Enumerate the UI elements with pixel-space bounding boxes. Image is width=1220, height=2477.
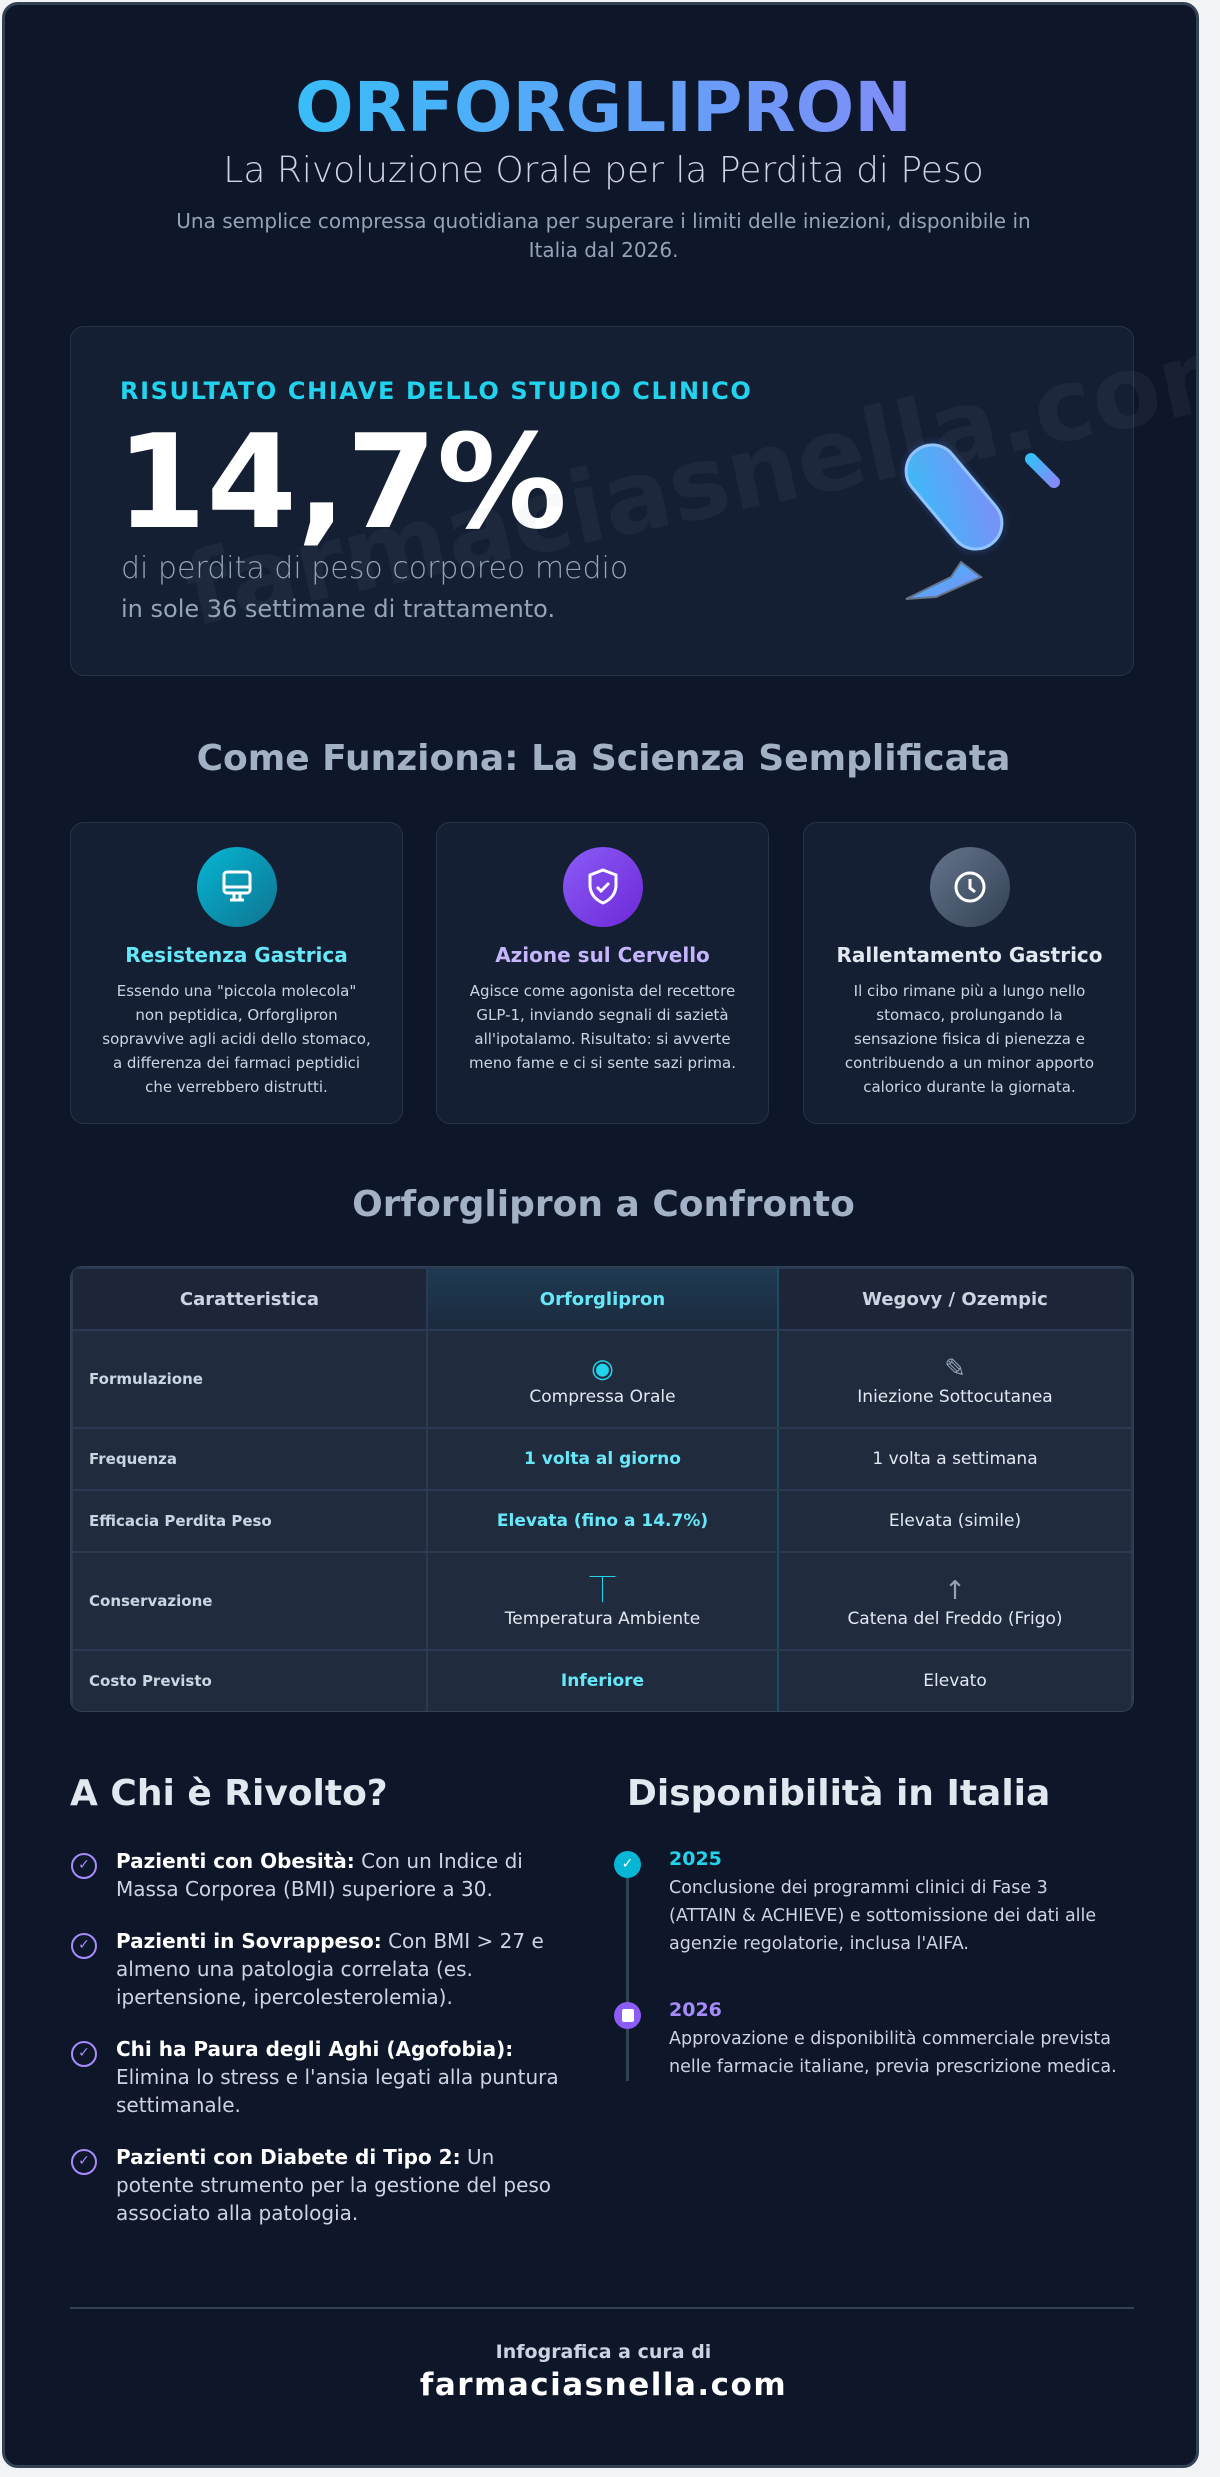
comparison table: 1 volta al giorno (524, 1449, 681, 1469)
list: target patients: ✓ (78, 2153, 90, 2169)
comparison table: Inferiore (561, 1671, 644, 1691)
footer credit: Infografica a cura di (496, 2341, 711, 2363)
comparison table: Efficacia Perdita Peso (89, 1512, 272, 1530)
timeline: ✓ (622, 1856, 633, 1872)
heading: disponibilità: Disponibilità in Italia (627, 1773, 1050, 1814)
title: ORFORGLIPRON (295, 68, 912, 148)
milestone 2025 (614, 1848, 1096, 1954)
panel: resistenza gastrica (70, 822, 403, 1124)
heading: come funziona: Come Funziona: La Scienza Semplificata (197, 738, 1010, 779)
timeline (614, 1848, 1117, 2081)
subtitle: La Rivoluzione Orale per la Perdita di Peso (223, 150, 984, 191)
card title: Rallentamento Gastrico (836, 943, 1103, 967)
list: target patients: ✓ (78, 1937, 90, 1953)
comparison table: Elevato (923, 1671, 987, 1691)
comparison table: Elevata (fino a 14.7%) (497, 1511, 708, 1531)
comparison table: ✎ (944, 1354, 966, 1384)
timeline: Conclusione dei programmi clinici di Fase 3 (ATTAIN & ACHIEVE) e sottomissione dei dati alle agenzie regolatorie, inclusa l'AIFA. (669, 1878, 1096, 1954)
card title: Azione sul Cervello (495, 943, 710, 967)
intro text: Una semplice compressa quotidiana per superare i limiti delle iniezioni, disponibile in (176, 209, 1031, 233)
comparison table: ⏉ (589, 1576, 616, 1606)
number caption: di perdita di peso corporeo medio (121, 551, 628, 586)
footer credit: farmaciasnella.com (420, 2367, 787, 2403)
kicker label: RISULTATO CHIAVE DELLO STUDIO CLINICO (120, 377, 752, 405)
comparison table: Costo Previsto (89, 1672, 212, 1690)
intro text: Italia dal 2026. (529, 238, 678, 262)
comparison table: Conservazione (89, 1592, 212, 1610)
list item: sovrappeso (71, 1929, 544, 2009)
list: target patients: Pazienti in Sovrappeso: Con BMI > 27 e almeno una patologia correlata (es. ipertensione, ipercolesterolemia). (116, 1929, 544, 2009)
list: target patients: Chi ha Paura degli Aghi (Agofobia): Elimina lo stress e l'ansia legati alla puntura settimanale. (116, 2037, 559, 2117)
list: target patients: Pazienti con Obesità: Con un Indice di Massa Corporea (BMI) superiore a 30. (116, 1849, 523, 1901)
comparison table (70, 1266, 1134, 1712)
list: target patients: Pazienti con Diabete di Tipo 2: Un potente strumento per la gestione del peso associato alla patologia. (116, 2145, 551, 2225)
panel: key result (70, 326, 1134, 676)
heading: a chi è rivolto: A Chi è Rivolto? (70, 1773, 388, 1814)
comparison table: Wegovy / Ozempic (862, 1288, 1048, 1310)
big number: 14,7% (116, 406, 567, 558)
icon: monitor (197, 847, 277, 927)
comparison table: ◉ (591, 1354, 614, 1384)
comparison table: Iniezione Sottocutanea (857, 1387, 1053, 1407)
card text: Agisce come agonista del recettore GLP-1, inviando segnali di sazietà all'ipotalamo. Risultato: si avverte meno fame e ci si sente sazi prima. (469, 982, 736, 1072)
timeline: Approvazione e disponibilità commerciale prevista nelle farmacie italiane, previa prescrizione medica. (669, 2029, 1117, 2077)
card title: Resistenza Gastrica (125, 943, 348, 967)
icon: pill (900, 439, 1060, 600)
comparison table: Caratteristica (180, 1288, 319, 1310)
list item: agofobia (71, 2037, 559, 2117)
comparison table: ↑ (944, 1576, 966, 1606)
comparison table: 1 volta a settimana (872, 1449, 1038, 1469)
card text: Essendo una "piccola molecola" non peptidica, Orforglipron sopravvive agli acidi dello stomaco, a differenza dei farmaci peptidici che verrebbero distrutti. (102, 982, 371, 1096)
list: target patients: ✓ (78, 2045, 90, 2061)
timeline: 2025 (669, 1848, 722, 1870)
comparison table: Elevata (simile) (889, 1511, 1021, 1531)
comparison table: Frequenza (89, 1450, 177, 1468)
icon: shield (563, 847, 643, 927)
comparison table: Catena del Freddo (Frigo) (847, 1609, 1063, 1629)
duration caption: in sole 36 settimane di trattamento. (121, 595, 555, 623)
icon: clock (930, 847, 1010, 927)
panel: rallentamento gastrico (803, 822, 1136, 1124)
list item: obesità (71, 1849, 523, 1901)
comparison table: Temperatura Ambiente (505, 1609, 700, 1629)
list: target patients (71, 1849, 559, 2225)
comparison table: Compressa Orale (529, 1387, 676, 1407)
heading: confronto: Orforglipron a Confronto (352, 1184, 855, 1225)
timeline: 2026 (669, 1999, 722, 2021)
intro text (176, 209, 1031, 262)
footer credit (420, 2341, 787, 2403)
milestone 2026 (614, 1999, 1117, 2077)
list item: diabete (71, 2145, 551, 2225)
comparison table: Formulazione (89, 1370, 203, 1388)
panel: azione sul cervello (436, 822, 769, 1124)
card text: Il cibo rimane più a lungo nello stomaco, prolungando la sensazione fisica di pienezza e contribuendo a un minor apporto calorico durante la giornata. (845, 982, 1094, 1096)
list: target patients: ✓ (78, 1857, 90, 1873)
comparison table: Orforglipron (540, 1288, 665, 1310)
